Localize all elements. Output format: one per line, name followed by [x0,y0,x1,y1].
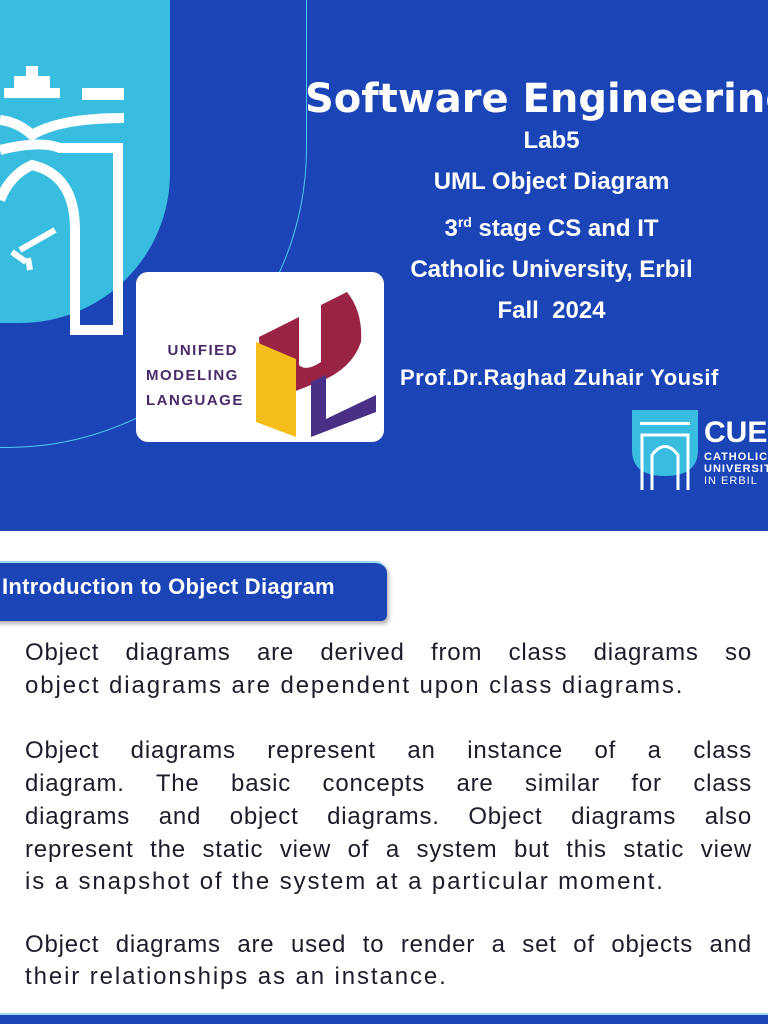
body text: Object diagrams are used to render a set of objects and [25,931,752,958]
UML logo card [136,272,384,442]
decorative light-blue shape with university crest [0,0,170,323]
body text: Object diagrams represent an instance of a class [25,737,752,764]
subtitle lines [410,127,693,324]
subtitle lines: Catholic University, Erbil [410,256,693,283]
section heading: Introduction to Object Diagram: Introduction to Object Diagram [2,574,335,599]
body text [25,639,752,990]
top panel: title slide [0,0,768,531]
body text: diagram. The basic concepts are similar for class [25,770,752,797]
bottom band [0,1013,768,1024]
body text: their relationships as an instance. [25,963,448,990]
body text: diagrams and object diagrams. Object diagrams also [25,803,752,830]
subtitle lines: UML Object Diagram [434,168,669,195]
author: Prof.Dr.Raghad Zuhair Yousif [400,365,719,390]
CUE logo: IN ERBIL [704,475,758,487]
section heading: Introduction to Object Diagram [0,561,387,621]
thin arc line [0,0,307,448]
body text: is a snapshot of the system at a particular moment. [25,868,665,895]
subtitle lines: Fall 2024 [497,297,606,324]
UML logo card: LANGUAGE [146,392,244,409]
UML logo card: UNIFIED [168,342,238,359]
subtitle lines: Lab5 [523,127,580,154]
UML logo card: MODELING [146,367,239,384]
body text: represent the static view of a system but this static view [25,836,752,863]
CUE logo: CUE [704,416,767,449]
CUE logo: CATHOLIC [704,451,768,463]
subtitle lines: 3rd stage CS and IT [444,214,659,242]
icon: crest outline [0,66,124,335]
body text: object diagrams are dependent upon class diagrams. [25,672,684,699]
CUE logo [632,410,768,490]
body text: Object diagrams are derived from class diagrams so [25,639,752,666]
